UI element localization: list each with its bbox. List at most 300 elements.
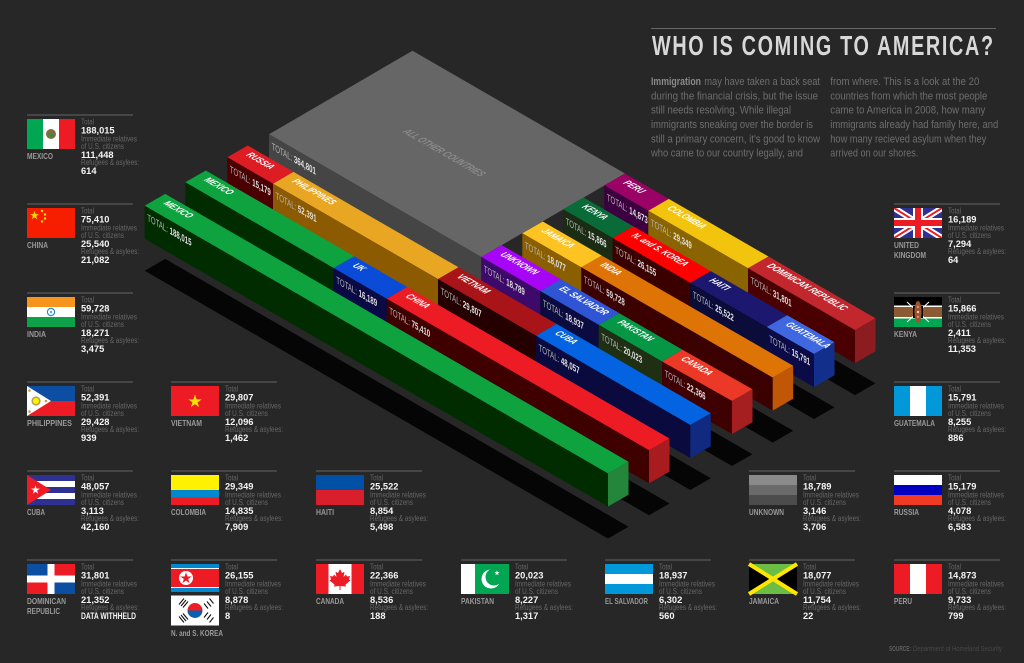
stats: 8,255 [948, 417, 971, 427]
intro text column 1: who came to our country legally, and [650, 148, 803, 160]
stats: Refugees & asylees: [225, 603, 283, 612]
stats: 64 [948, 255, 959, 265]
stats: Immediate relatives [370, 580, 426, 589]
stats: 59,728 [81, 304, 109, 314]
bar: India [581, 256, 793, 411]
stats [81, 384, 139, 443]
country name: PERU [894, 596, 912, 606]
stats [659, 562, 717, 621]
total: Cuba: TOTAL: 48,057 [539, 341, 580, 377]
stats: Total [948, 384, 961, 394]
stats: Refugees & asylees: [370, 514, 428, 523]
bar: Cuba [536, 324, 711, 458]
stats: 29,349 [225, 482, 253, 492]
stats: 7,294 [948, 239, 972, 249]
stats: Refugees & asylees: [948, 514, 1006, 523]
stats: 25,522 [370, 482, 398, 492]
stats: Total [948, 296, 961, 304]
label: Peru: PERU [621, 179, 649, 195]
stats [803, 562, 861, 621]
label: Vietnam: VIETNAM [454, 273, 494, 295]
stats: 18,077 [803, 570, 831, 580]
stats: 11,754 [803, 595, 832, 605]
stats [803, 474, 861, 532]
panel: Pakistan [461, 560, 573, 621]
panel: Mexico [27, 114, 139, 176]
total: India: TOTAL: 59,728 [584, 273, 625, 308]
intro text column 1: during the financial crisis, but the issue [651, 90, 818, 102]
country name: GUATEMALA [894, 418, 935, 428]
stats: Total [81, 296, 94, 304]
country name: PHILIPPINES [27, 418, 72, 428]
label: China: CHINA [403, 292, 433, 310]
bar: Vietnam [438, 267, 556, 369]
stats: 6,583 [948, 522, 971, 532]
stats: 8,536 [370, 595, 393, 605]
stats: Refugees & asylees: [81, 603, 139, 612]
intro text column 2: arrived on our shores. [830, 148, 918, 160]
stats: of U.S. citizens [515, 587, 558, 596]
stats: Total [81, 474, 94, 482]
country name: UNKNOWN [749, 507, 784, 517]
intro text column 1: still needs resolving. While illegal [651, 105, 791, 117]
label: Colombia: COLOMBIA [665, 204, 710, 230]
flag: Canada [316, 564, 364, 594]
bar: UK [334, 256, 407, 332]
panel: Colombia [171, 470, 283, 532]
flag: South Korea [171, 596, 219, 626]
stats: of U.S. citizens [81, 142, 124, 151]
label: Cuba: CUBA [552, 329, 581, 346]
country name: KENYA [894, 329, 917, 339]
stats: Immediate relatives [515, 580, 571, 589]
stats: 22 [803, 611, 813, 621]
panel: El Salvador [605, 560, 717, 621]
stats: of U.S. citizens [81, 587, 124, 596]
stats: of U.S. citizens [948, 320, 991, 329]
flag: India [27, 297, 75, 327]
flag: Philippines [27, 386, 75, 416]
stats: Refugees & asylees: [948, 336, 1006, 345]
country name: VIETNAM [171, 418, 202, 428]
source: Department of Homeland Security [913, 644, 1002, 653]
bar: Haiti [690, 271, 787, 360]
stats: 25,540 [81, 239, 109, 249]
stats: Immediate relatives [948, 224, 1004, 233]
stats: of U.S. citizens [370, 587, 413, 596]
stats: of U.S. citizens [81, 231, 124, 240]
stats: 21,352 [81, 595, 109, 605]
stats: of U.S. citizens [225, 409, 268, 418]
flag: Haiti [316, 475, 364, 505]
stats: Refugees & asylees: [81, 425, 139, 434]
total: Vietnam: TOTAL: 29,807 [441, 285, 482, 320]
country name: COLOMBIA [171, 507, 206, 517]
label: Jamaica: JAMAICA [539, 227, 578, 249]
stats: Total [948, 474, 961, 482]
stats: Immediate relatives [225, 580, 281, 589]
stats: Total [948, 562, 961, 572]
stats: 18,789 [803, 482, 831, 492]
stats: Total [225, 474, 238, 482]
panel: Canada [316, 560, 428, 621]
stats: of U.S. citizens [81, 498, 124, 507]
stats: Refugees & asylees: [225, 514, 283, 523]
total: Kenya: TOTAL: 15,866 [566, 215, 607, 250]
stats: of U.S. citizens [948, 409, 991, 418]
stats: DATA WITHHELD [81, 611, 136, 621]
panel: Vietnam [171, 382, 283, 443]
intro text column 2: immigrants already had family here, and [830, 119, 998, 131]
label: Mexico: MEXICO [202, 176, 237, 196]
label: UK: UK [350, 262, 370, 273]
stats: Refugees & asylees: [803, 603, 861, 612]
stats: 614 [81, 166, 97, 176]
stats: Immediate relatives [803, 580, 859, 589]
bar: Mexico [145, 194, 628, 506]
stats [948, 562, 1006, 621]
stats: 5,498 [370, 522, 393, 532]
flag: Dominican Republic [27, 564, 75, 594]
stats: 42,160 [81, 522, 109, 532]
stats: 188 [370, 611, 386, 621]
stats: 48,057 [81, 482, 109, 492]
stats: Immediate relatives [81, 580, 137, 589]
label: Kenya: KENYA [579, 203, 611, 221]
total: Mexico: TOTAL: 188,015 [147, 211, 192, 249]
stats: Immediate relatives [659, 580, 715, 589]
stats: 4,078 [948, 506, 971, 516]
flag: Peru [894, 564, 942, 594]
panel: Dominican Republic [27, 560, 139, 621]
stats: 111,448 [81, 150, 114, 160]
country name: DOMINICAN [27, 596, 66, 606]
country name: MEXICO [27, 151, 53, 161]
panel: Russia [894, 470, 1006, 532]
stats: Refugees & asylees: [225, 425, 283, 434]
intro text column 2: how many recieved asylum when they [830, 133, 987, 145]
stats: Total [370, 474, 383, 482]
intro text column 1: may have taken a back seat [704, 76, 820, 88]
intro text column 1: Immigration [651, 76, 701, 88]
country name: RUSSIA [894, 507, 919, 517]
stats: Total [81, 384, 94, 394]
stats: Immediate relatives [225, 402, 281, 411]
stats: 52,391 [81, 392, 109, 402]
label: Pakistan: PAKISTAN [615, 318, 657, 343]
stats [81, 206, 139, 265]
total: Pakistan: TOTAL: 20,023 [601, 331, 642, 366]
stats: Refugees & asylees: [370, 603, 428, 612]
stats: Refugees & asylees: [81, 158, 139, 167]
stats: 31,801 [81, 570, 109, 580]
stats: 8,227 [515, 595, 538, 605]
total: El Salvador: TOTAL: 18,937 [543, 297, 584, 332]
stats: Total [659, 562, 672, 572]
panel: Cuba [27, 470, 139, 532]
flag: North Korea [171, 564, 219, 592]
panel: Peru [894, 560, 1006, 621]
label: Dominican Republic: DOMINICAN REPUBLIC [764, 262, 851, 312]
bar: Mexico (family segment) [185, 170, 354, 301]
total: China: TOTAL: 75,410 [389, 305, 430, 340]
stats: Refugees & asylees: [948, 247, 1006, 256]
flag: Jamaica [749, 564, 797, 594]
stats: 3,475 [81, 344, 104, 354]
stats: 14,835 [225, 506, 253, 516]
bar: Pakistan [599, 313, 682, 394]
country name: PAKISTAN [461, 596, 494, 606]
stats: Immediate relatives [225, 491, 281, 500]
stats: 21,082 [81, 255, 109, 265]
title: WHO IS COMING TO AMERICA? [652, 31, 995, 62]
bar: Colombia [648, 199, 768, 301]
stats: of U.S. citizens [803, 498, 846, 507]
stats [225, 384, 283, 443]
stats: Immediate relatives [81, 313, 137, 322]
stats [948, 474, 1006, 532]
total: Canada: TOTAL: 22,366 [665, 367, 706, 402]
label: Russia: RUSSIA [244, 151, 278, 171]
flag: China [27, 208, 75, 238]
label: India: INDIA [598, 261, 625, 277]
stats: of U.S. citizens [370, 498, 413, 507]
panel: Guatemala [894, 382, 1006, 443]
panel: Philippines [27, 382, 139, 443]
stats: Refugees & asylees: [81, 336, 139, 345]
bar: N. and S. Korea [613, 226, 711, 316]
stats [81, 118, 139, 176]
country name: CANADA [316, 596, 344, 606]
label: Mexico: MEXICO [161, 199, 196, 220]
source [889, 644, 1002, 653]
country name: JAMAICA [749, 596, 779, 606]
total: Philippines: TOTAL: 52,391 [276, 189, 317, 225]
total: Dominican Republic: TOTAL: 31,801 [751, 274, 792, 309]
label: Guatemala: GUATEMALA [783, 320, 834, 350]
bar shadows [145, 188, 875, 538]
stats: Immediate relatives [81, 402, 137, 411]
label: Philippines: PHILIPPINES [289, 177, 340, 206]
stats [81, 474, 139, 532]
total: Russia: TOTAL: 15,179 [230, 163, 271, 198]
label: El Salvador: EL SALVADOR [557, 285, 612, 317]
flag: El Salvador [605, 564, 653, 594]
stats [81, 562, 139, 621]
stats: 886 [948, 433, 964, 443]
stats: Total [515, 562, 528, 572]
country name: CHINA [27, 240, 48, 250]
panel: Jamaica [749, 560, 861, 621]
stats: of U.S. citizens [948, 498, 991, 507]
stats: Total [948, 206, 961, 216]
stats: 14,873 [948, 570, 976, 580]
bar: China [387, 287, 670, 483]
stats: 16,189 [948, 214, 976, 224]
panel: China [27, 204, 139, 265]
total: Jamaica: TOTAL: 18,077 [525, 239, 566, 274]
stats: Refugees & asylees: [659, 603, 717, 612]
bar: Dominican Republic [748, 256, 876, 363]
stats: 20,023 [515, 570, 543, 580]
stats: 3,146 [803, 506, 826, 516]
stats: 7,909 [225, 522, 248, 532]
stats [370, 474, 428, 532]
stats: Immediate relatives [81, 135, 137, 144]
flag: Colombia [171, 475, 219, 505]
country name: KINGDOM [894, 250, 926, 260]
panel: United Kingdom [894, 204, 1006, 265]
stats: Immediate relatives [948, 313, 1004, 322]
intro text column 1: immigrants sneaking over the border is [651, 119, 813, 131]
stats [515, 562, 573, 621]
stats: of U.S. citizens [81, 409, 124, 418]
stats: Immediate relatives [81, 491, 137, 500]
stats: Total [225, 562, 238, 572]
bar: Peru [604, 174, 669, 244]
stats: Total [370, 562, 383, 572]
stats [948, 296, 1006, 354]
stats: 18,937 [659, 570, 687, 580]
stats: 22,366 [370, 570, 398, 580]
stats: of U.S. citizens [948, 231, 991, 240]
bar: Jamaica [522, 222, 602, 300]
stats: 15,866 [948, 304, 976, 314]
stats: Immediate relatives [803, 491, 859, 500]
flag: Unknown [749, 475, 797, 505]
total: Korea: TOTAL: 26,155 [615, 244, 656, 279]
bar: Philippines [273, 172, 458, 312]
stats: Immediate relatives [81, 224, 137, 233]
intro text column 2: came to America in 2008, how many [830, 105, 986, 117]
country name [27, 596, 66, 616]
stats: Total [81, 118, 94, 126]
stats: 9,733 [948, 595, 971, 605]
stats: Immediate relatives [948, 580, 1004, 589]
flag: Pakistan [461, 564, 509, 594]
stats: of U.S. citizens [81, 320, 124, 329]
stats [370, 562, 428, 621]
stats: 18,271 [81, 328, 109, 338]
total: Unknown: TOTAL: 18,789 [484, 263, 525, 298]
panel: India [27, 292, 139, 354]
flag: Cuba [27, 475, 75, 505]
bar: all other countries [269, 51, 625, 290]
intro text column 2: from where. This is a look at the 20 [830, 76, 979, 88]
country name: REPUBLIC [27, 606, 60, 616]
stats: of U.S. citizens [659, 587, 702, 596]
stats: Refugees & asylees: [948, 603, 1006, 612]
total: Guatemala: TOTAL: 15,791 [769, 333, 810, 368]
country name: HAITI [316, 507, 334, 517]
total: UK: TOTAL: 16,189 [336, 274, 377, 309]
bar: Guatemala [767, 315, 834, 387]
stats: 939 [81, 433, 97, 443]
stats: 8,878 [225, 595, 248, 605]
panel: Unknown [749, 470, 861, 532]
stats: 26,155 [225, 570, 253, 580]
stats: Total [81, 206, 94, 216]
stats: Total [81, 562, 94, 572]
stats: Refugees & asylees: [81, 514, 139, 523]
bar: El Salvador [540, 279, 619, 358]
flag: United Kingdom [894, 208, 942, 238]
country name: EL SALVADOR [605, 596, 648, 606]
stats: Immediate relatives [948, 491, 1004, 500]
stats: 11,353 [948, 344, 976, 354]
total: Peru: TOTAL: 14,873 [607, 191, 648, 226]
stats [225, 562, 283, 621]
flag: Vietnam [171, 386, 219, 416]
stats: 75,410 [81, 214, 109, 224]
total: Colombia: TOTAL: 29,349 [651, 216, 692, 252]
label: Unknown: UNKNOWN [498, 250, 542, 276]
country name [894, 240, 926, 260]
panel: Kenya [894, 292, 1006, 354]
bar: Russia [227, 146, 294, 217]
intro text column 1: still a primary concern, it's good to know [651, 133, 820, 145]
intro text column 2: countries from which the most people [830, 90, 987, 102]
label: Haiti: HAITI [707, 276, 734, 292]
stats: of U.S. citizens [948, 587, 991, 596]
stats: 799 [948, 611, 964, 621]
stats: 3,113 [81, 506, 104, 516]
total: Haiti: TOTAL: 25,522 [693, 289, 734, 324]
label: Canada: CANADA [678, 355, 716, 377]
flag: Kenya [894, 297, 942, 327]
label: all other countries: ALL OTHER COUNTRIES [398, 127, 489, 179]
stats: Total [803, 474, 816, 482]
stats: of U.S. citizens [225, 587, 268, 596]
stats: 12,096 [225, 417, 253, 427]
panel: N. and S. Korea [171, 560, 283, 638]
flag: Mexico [27, 119, 75, 149]
stats: Refugees & asylees: [948, 425, 1006, 434]
bar: Kenya [563, 198, 633, 271]
stats: 560 [659, 611, 675, 621]
stats: Immediate relatives [948, 402, 1004, 411]
stats: 2,411 [948, 328, 971, 338]
source: SOURCE: [889, 644, 911, 653]
intro text column 2 [830, 76, 998, 160]
stats: 15,791 [948, 392, 976, 402]
intro text column 1 [650, 76, 820, 160]
bar: Unknown [481, 245, 561, 324]
stats: Refugees & asylees: [515, 603, 573, 612]
stats: 8,854 [370, 506, 394, 516]
stats [225, 474, 283, 532]
stats: of U.S. citizens [803, 587, 846, 596]
stats: of U.S. citizens [225, 498, 268, 507]
stats: Immediate relatives [370, 491, 426, 500]
country name: UNITED [894, 240, 919, 250]
country name: N. and S. KOREA [171, 628, 223, 638]
stats [948, 206, 1006, 265]
panel: Haiti [316, 470, 428, 532]
stats: 29,807 [225, 392, 253, 402]
stats: 8 [225, 611, 230, 621]
total: all other countries: TOTAL: 364,801 [272, 140, 316, 177]
stats: 1,317 [515, 611, 538, 621]
stats: 6,302 [659, 595, 682, 605]
country name: CUBA [27, 507, 45, 517]
stats [948, 384, 1006, 443]
stats: 15,179 [948, 482, 976, 492]
label: Korea: N. and S. KOREA [629, 231, 692, 268]
stats: 188,015 [81, 126, 115, 136]
flag: Russia [894, 475, 942, 505]
stats: 3,706 [803, 522, 826, 532]
